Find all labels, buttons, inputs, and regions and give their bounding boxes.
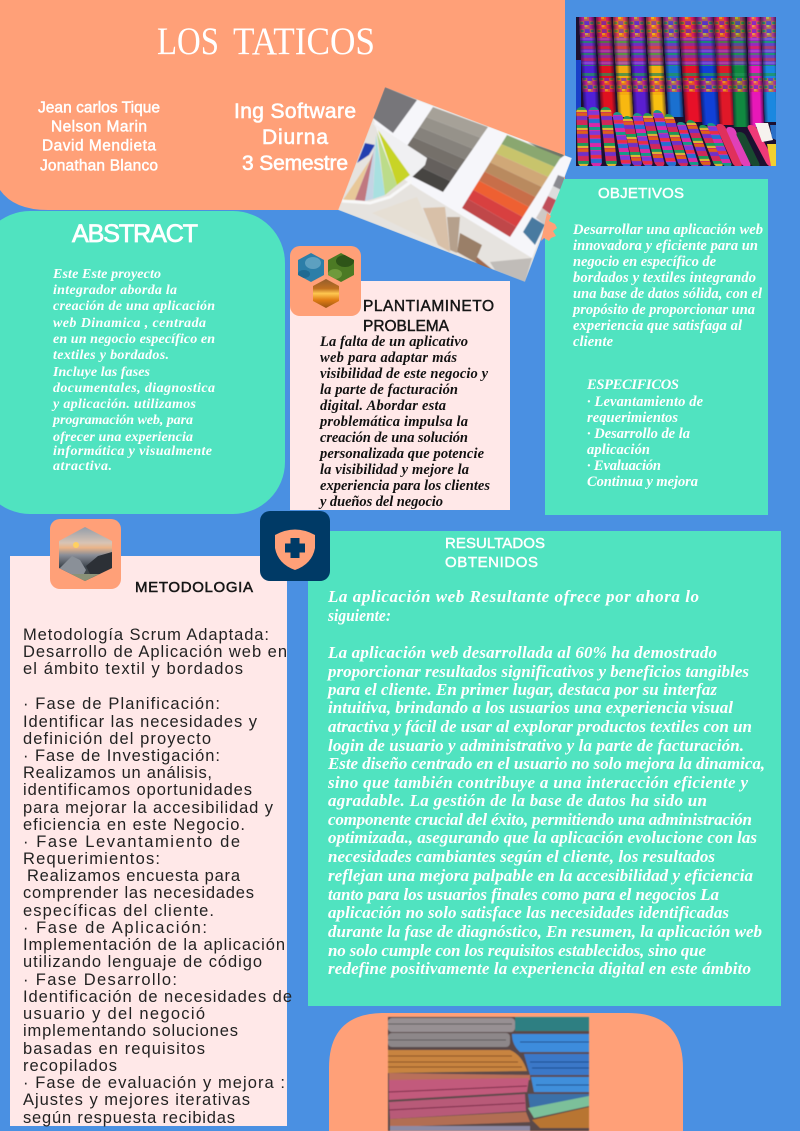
problem text: digital. Abordar esta [320, 398, 446, 414]
specific objectives text: ESPECIFICOS [586, 377, 679, 393]
general objective text: innovadora y eficiente para un [573, 238, 758, 254]
results text: Este diseño centrado en el usuario no solo mejora la dinamica, [327, 754, 765, 773]
abstract text: en un negocio específico en [53, 332, 215, 347]
specific objectives text: Continua y mejora [587, 474, 698, 490]
methodology text: Metodología Scrum Adaptada: [23, 626, 269, 644]
heading: resultados: RESULTADOS [445, 535, 545, 552]
methodology text: Desarrollo de Aplicación web en [23, 643, 287, 661]
results intro: siguiente: [327, 606, 391, 625]
methodology text [23, 626, 292, 1127]
methodology text: · Fase de evaluación y mejora : [23, 1074, 285, 1092]
heading: resultados [445, 535, 545, 571]
methodology text: Identificación de necesidades de [23, 988, 292, 1006]
general objective text: cliente [573, 334, 614, 350]
methodology text: usuario y del negoció [23, 1005, 205, 1023]
general objective text: Desarrollar una aplicación web [572, 222, 763, 238]
abstract text: creación de una aplicación [53, 299, 215, 314]
heading: resultados: OBTENIDOS [445, 554, 538, 571]
results text: aplicación no solo satisface las necesidades identificadas [328, 903, 729, 922]
photo: stacked folded fabrics [388, 1017, 589, 1131]
pink fabric stack [389, 1078, 530, 1131]
heading: planteamiento: PLANTIAMINETO [363, 298, 494, 315]
methodology text: el ámbito textil y bordados [23, 660, 243, 678]
specific objectives text: requerimientos [587, 410, 678, 426]
problem text: personalizada que potencie [318, 446, 485, 462]
results text: redefine positivamente la experiencia digital en este ámbito [328, 959, 751, 978]
icon: puzzle accent [541, 213, 557, 241]
blue fabric stack [512, 1017, 589, 1128]
methodology text: Implementación de la aplicación [23, 936, 285, 954]
methodology text: · Fase de Planificación: [23, 695, 220, 713]
specific objectives text: · Evaluación [587, 458, 661, 474]
methodology text: Ajustes y mejores iterativas [23, 1091, 250, 1109]
methodology text: Identificar las necesidades y [23, 713, 258, 731]
abstract text: programación web, para [52, 413, 193, 428]
gray fabric stack [388, 1018, 515, 1047]
methodology text: basadas en requisitos [23, 1040, 205, 1058]
specific objectives text: aplicación [587, 442, 650, 458]
photo: colourful woven fabric rolls [576, 17, 780, 167]
results text: para el cliente. En primer lugar, destaca por su interfaz [326, 680, 717, 699]
results text: proporcionar resultados significativos y beneficios tangibles [326, 662, 749, 681]
team members: Jonathan Blanco [40, 158, 158, 174]
methodology text: recopilados [23, 1057, 117, 1075]
icon: mountain sunset hexagon [50, 519, 121, 589]
abstract text [51, 267, 215, 474]
methodology text: · Fase Levantamiento de [23, 833, 240, 851]
methodology text: específicas del cliente. [23, 902, 214, 920]
abstract text: ofrecer una experiencia [53, 430, 193, 445]
methodology text: · Fase de Aplicación: [23, 919, 207, 937]
specific objectives text [586, 377, 704, 490]
methodology text: según respuesta recibidas [23, 1109, 235, 1127]
methodology text: definición del proyecto [23, 730, 211, 748]
methodology text: eficiencia en este Negocio. [23, 816, 245, 834]
methodology text: Realizamos un análisis, [23, 764, 212, 782]
results text: sino que también contribuye a una interacción eficiente y [327, 773, 748, 792]
general objective text: una base de datos sólida, con el [573, 286, 762, 302]
photo: textile colour samples [338, 87, 572, 282]
results text [326, 643, 765, 978]
problem text: visibilidad de este negocio y [320, 366, 489, 382]
problem text: experiencia para los clientes [320, 478, 490, 494]
results text: login de usuario y administrativo y la parte de facturación. [328, 736, 744, 755]
program info: Ing Software [234, 100, 356, 123]
abstract text: informática y visualmente [53, 444, 212, 459]
results text: La aplicación web desarrollada al 60% ha demostrado [327, 643, 717, 662]
results text: durante la fase de diagnóstico, En resumen, la aplicación web [328, 922, 762, 941]
results text: atractiva y fácil de usar al explorar productos textiles con un [328, 717, 752, 736]
abstract text: documentales, diagnostica [53, 381, 215, 396]
results text: necesidades cambiantes según el cliente, los resultados [328, 847, 715, 866]
abstract text: Este Este proyecto [52, 267, 161, 282]
general objective text: bordados y textiles integrando [573, 270, 756, 286]
results text: tanto para los usuarios finales como para el negocios La [328, 885, 720, 904]
results text: intuitiva, brindando a los usuarios una experiencia visual [328, 698, 733, 717]
methodology text: identificamos oportunidades [23, 781, 252, 799]
results intro [327, 587, 699, 625]
heading: planteamiento [363, 298, 494, 335]
team members: Jean carlos Tique [38, 100, 160, 116]
problem text: y dueños del negocio [318, 494, 443, 510]
fabric rolls upper row [579, 17, 780, 127]
panel: bottom photo background [329, 1013, 683, 1131]
title: LOS [157, 20, 219, 63]
general objective text: propósito de proporcionar una [571, 302, 755, 318]
results text: optimizada., asegurando que la aplicación evolucione con las [328, 828, 757, 847]
heading: abstract: ABSTRACT [72, 220, 198, 248]
results intro: La aplicación web Resultante ofrece por ahora lo [327, 587, 699, 606]
team members [38, 100, 160, 174]
problem text: creación de una solución [320, 430, 468, 446]
specific objectives text: · Desarrollo de la [587, 426, 690, 442]
panel: objetivos [545, 179, 768, 515]
results text: no solo cumple con los requisitos establecidos, sino que [328, 941, 706, 960]
orange fabric stack [388, 1050, 530, 1082]
team members: Nelson Marin [51, 118, 147, 136]
general objective text: experiencia que satisfaga al [573, 318, 742, 334]
program info: Diurna [262, 126, 328, 149]
problem text: la parte de facturación [320, 382, 458, 398]
panel: planteamiento del problema [290, 281, 510, 510]
methodology text: utilizando lenguaje de código [23, 953, 262, 971]
program info: 3 Semestre [242, 152, 348, 175]
problem text: problemática impulsa la [318, 414, 468, 430]
general objective text: negocio en específico de [573, 254, 717, 270]
methodology text: Realizamos encuesta para [27, 867, 241, 885]
program info [234, 100, 356, 175]
methodology text: comprender las necesidades [23, 884, 254, 902]
heading: metodologia: METODOLOGIA [135, 579, 253, 596]
methodology text: para mejorar la accesibilidad y [23, 799, 274, 817]
methodology text: implementando soluciones [23, 1022, 238, 1040]
results text: componente crucial del éxito, permitiendo una administración [328, 810, 752, 829]
abstract text: web Dinamica , centrada [53, 316, 206, 331]
team members: David Mendieta [42, 138, 156, 154]
results text: agradable. La gestión de la base de datos ha sido un [328, 791, 707, 810]
abstract text: textiles y bordados. [53, 348, 169, 363]
panel: abstract [0, 211, 285, 514]
general objective text [571, 222, 763, 350]
title [157, 20, 375, 63]
fabric rolls lower row [576, 107, 777, 167]
abstract text: atractiva. [53, 459, 112, 474]
abstract text: y aplicación. utilizamos [51, 397, 197, 412]
results text: reflejan una mejora palpable en la accesibilidad y eficiencia [328, 866, 754, 885]
problem text: La falta de un aplicativo [319, 334, 468, 350]
problem text: web para adaptar más [320, 350, 457, 366]
heading: objetivos: OBJETIVOS [598, 185, 684, 202]
problem text: la visibilidad y mejore la [320, 462, 469, 478]
methodology text: · Fase de Investigación: [23, 747, 220, 765]
methodology text: Requerimientos: [23, 850, 160, 868]
panel: header [0, 0, 565, 210]
icon: shield with cross [260, 511, 330, 581]
panel: metodologia [10, 556, 292, 1127]
title: TATICOS [233, 20, 375, 63]
heading: planteamiento: PROBLEMA [363, 318, 450, 335]
abstract text: integrador aborda la [53, 283, 177, 298]
problem text [318, 334, 490, 510]
methodology text: · Fase Desarrollo: [23, 971, 177, 989]
specific objectives text: · Levantamiento de [587, 394, 704, 410]
panel: resultados [308, 531, 781, 1006]
abstract text: Incluye las fases [52, 365, 151, 380]
icon: three hexagon images [290, 246, 361, 316]
